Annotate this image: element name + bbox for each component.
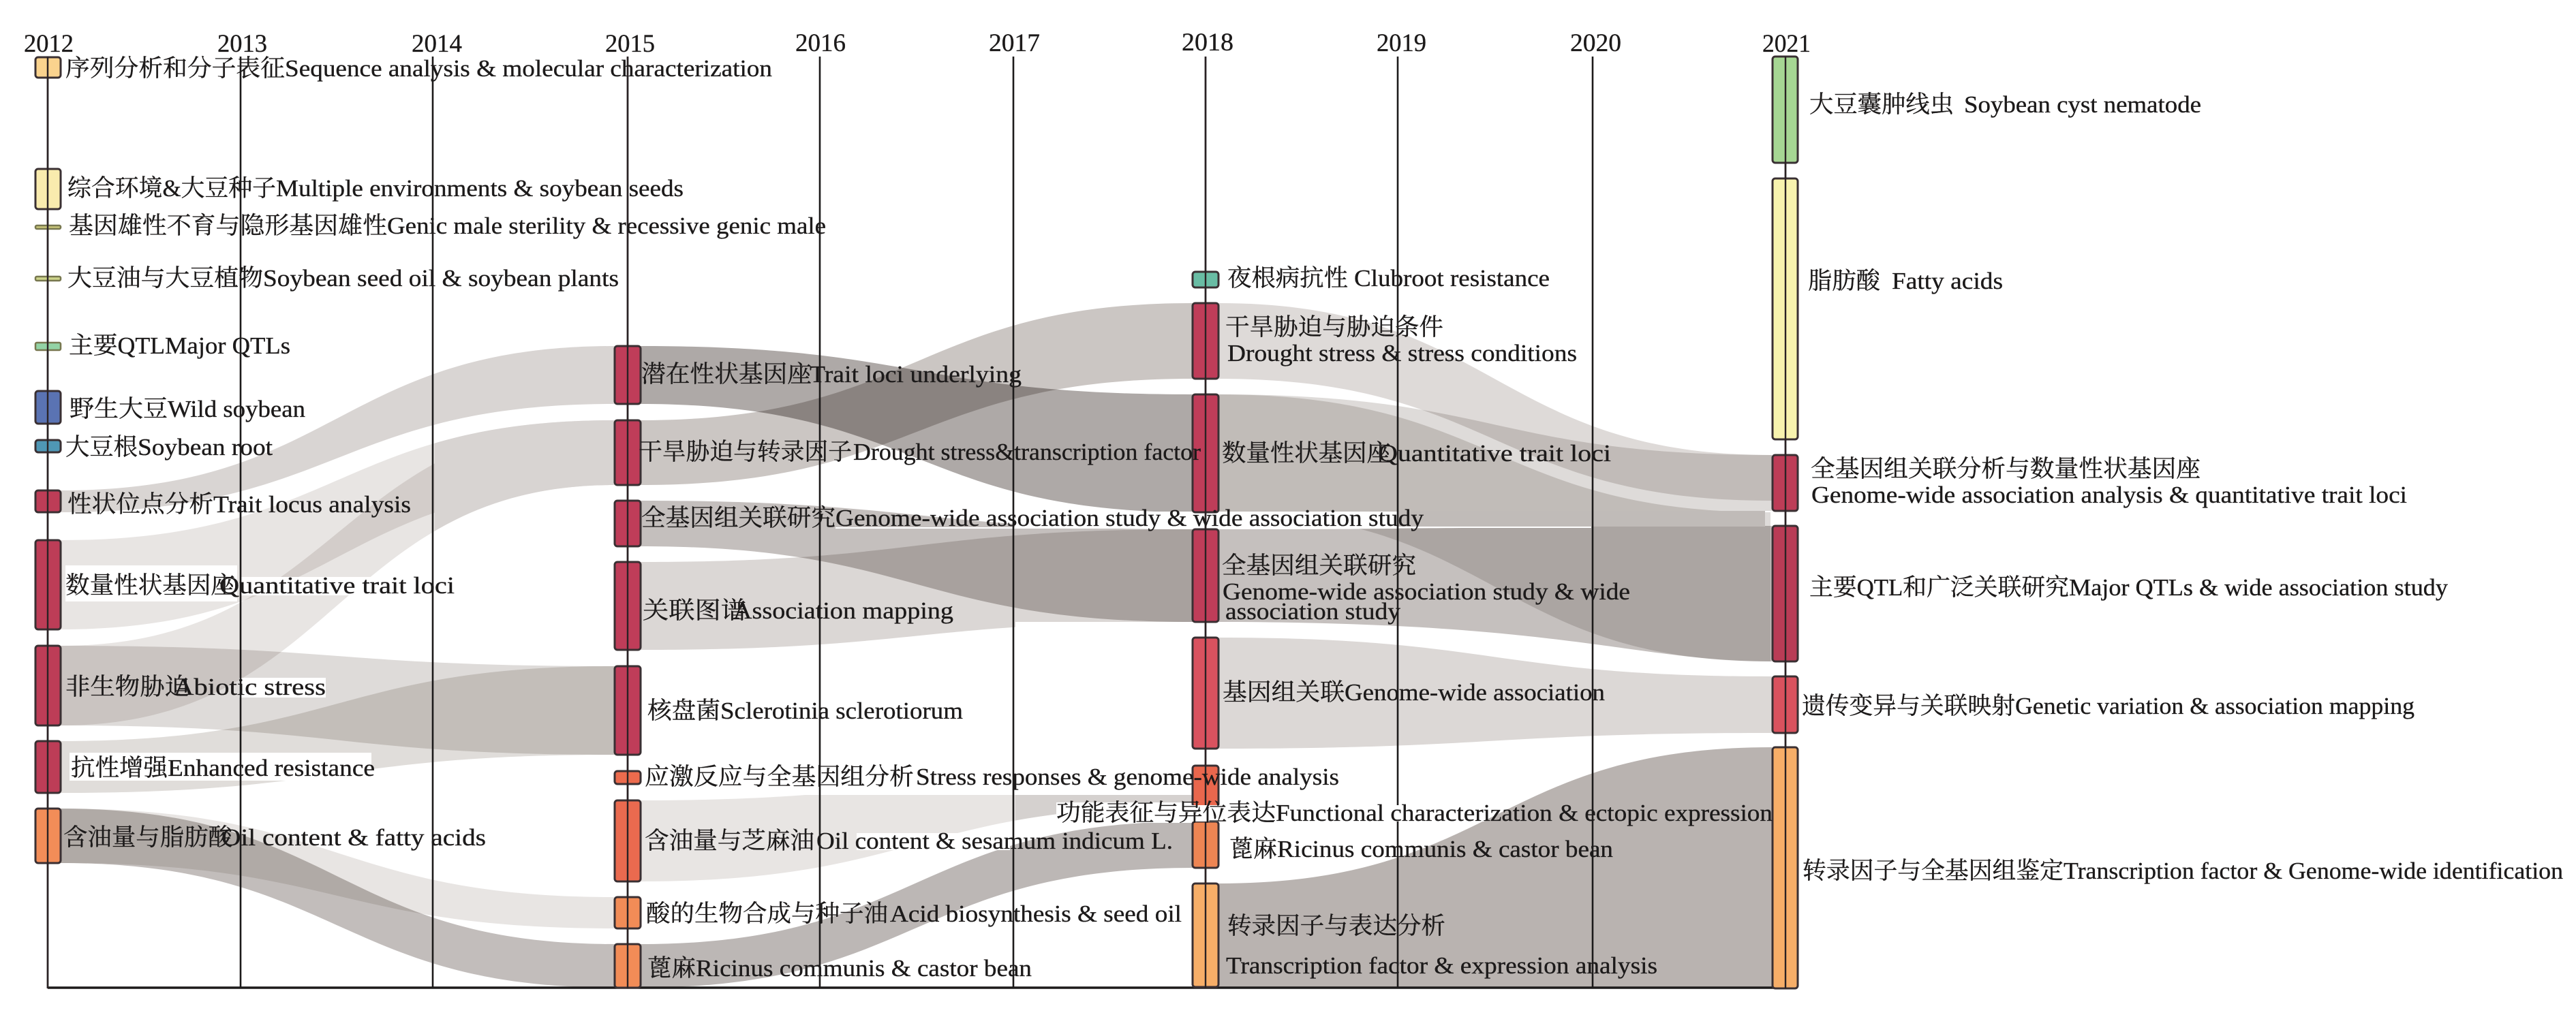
label: ricinus 2015: Ricinus communis & castor bean — [696, 955, 1032, 982]
label: association mapping: Association mapping — [733, 597, 953, 624]
year labels — [24, 29, 1811, 58]
flow: drought stress to drought conditions — [641, 303, 1193, 485]
label: drought stress conditions: 干旱胁迫与胁迫条件 — [1225, 314, 1443, 341]
year labels: 2013 — [217, 30, 267, 58]
label: quantitative trait loci 2018: Quantitative trait loci — [1378, 440, 1611, 467]
label: trait locus analysis — [67, 491, 411, 518]
flow tone change: stress responses inflow right of 2017 — [1015, 795, 1191, 820]
label: trait locus analysis: 性状位点分析 — [67, 491, 213, 518]
label: sequence analysis — [65, 55, 772, 82]
flow: oil content and sesamum to stress responses — [641, 766, 1193, 881]
label: quantitative trait loci 2012: 数量性状基因座 — [65, 572, 235, 599]
label: GWAS 2015: 全基因组关联研究 — [641, 505, 835, 531]
flow: oil content to acid biosynthesis — [61, 809, 615, 928]
label: genome-wide association: Genome-wide association — [1345, 679, 1605, 706]
label: transcription factor and identification: Transcription factor & Genome-wide identification — [2064, 858, 2563, 884]
white background of functional characterization label — [1056, 805, 1484, 822]
nodes: 2015 — [615, 346, 641, 988]
flow: quantitative trait loci to drought stress — [61, 420, 615, 629]
label: functional characterization: 功能表征与异位表达 — [1056, 800, 1276, 826]
year labels: 2021 — [1762, 30, 1811, 58]
label: sequence analysis: 序列分析和分子表征 — [65, 55, 285, 82]
label: multiple environments: 综合环境&大豆种子 — [67, 175, 276, 202]
white label backgrounds — [65, 512, 1591, 850]
label: genetic variation — [1802, 693, 2414, 719]
year labels: 2014 — [412, 30, 462, 58]
label: sclerotinia: 核盘菌 — [647, 698, 720, 724]
label: wild soybean — [70, 396, 305, 422]
label: soybean cyst nematode — [1809, 91, 2201, 118]
flow: transcription factor to transcription factor — [1218, 747, 1772, 988]
label: drought stress and transcription factor: Drought stress&transcription factor — [853, 439, 1201, 465]
label: major QTLs — [69, 332, 290, 359]
label: transcription factor and expression: Transcription factor & expression analysis — [1226, 952, 1657, 979]
label: drought stress conditions: Drought stress & stress conditions — [1227, 340, 1577, 366]
label: oil content and fatty acids — [63, 824, 486, 851]
label: oil content and fatty acids: Oil content & fatty acids — [221, 824, 486, 851]
year axis re-draw over nodes — [48, 57, 1785, 988]
flow: GWAS to GWAS — [641, 501, 1193, 622]
label: soybean seed oil: Soybean seed oil & soybean plants — [263, 265, 619, 292]
nodes: 2012 — [35, 57, 61, 863]
label: soybean cyst nematode: 大豆囊肿线虫 — [1809, 91, 1954, 118]
label: fatty acids: Fatty acids — [1892, 268, 2003, 294]
label: soybean root: 大豆根 — [65, 434, 138, 460]
label: wild soybean: Wild soybean — [168, 396, 305, 422]
label: wild soybean: 野生大豆 — [70, 396, 168, 422]
year labels: 2016 — [795, 29, 846, 57]
flow: trait loci underlying to quantitative trait loci — [641, 346, 1193, 512]
label: association mapping: 关联图谱 — [643, 597, 747, 624]
label: trait locus analysis: Trait locus analysis — [213, 491, 411, 518]
label: major QTLs: 主要QTL — [69, 332, 165, 359]
label: clubroot resistance: 夜根病抗性 — [1227, 265, 1348, 292]
label: acid biosynthesis: Acid biosynthesis & seed oil — [890, 901, 1182, 927]
label: GWAS 2018: 全基因组关联研究 — [1222, 552, 1416, 579]
label: oil content and sesamum — [645, 828, 1173, 854]
label: major QTLs and wide association — [1809, 574, 2449, 601]
flow: association mapping to GWAS — [641, 529, 1193, 650]
label: enhanced resistance: Enhanced resistance — [168, 755, 375, 781]
label: quantitative trait loci 2018: 数量性状基因座 — [1222, 440, 1391, 467]
label: trait loci underlying — [641, 361, 1022, 388]
label: ricinus 2015: 蓖麻 — [647, 955, 696, 982]
label: soybean seed oil — [67, 265, 619, 292]
flow: abiotic stress to drought stress — [61, 420, 615, 725]
label: sequence analysis: Sequence analysis & molecular characterization — [285, 55, 772, 82]
flow: quantitative trait loci to GWAS and QTL — [1218, 394, 1772, 512]
year labels: 2012 — [24, 30, 74, 58]
label: quantitative trait loci 2012: Quantitative trait loci — [219, 572, 455, 599]
label: oil content and sesamum: 含油量与芝麻油 — [645, 828, 814, 854]
label: stress responses: Stress responses & genome-wide analysis — [916, 764, 1339, 790]
label: sclerotinia: Sclerotinia sclerotiorum — [720, 698, 963, 724]
label: ricinus 2018: 蓖麻 — [1229, 836, 1277, 862]
label: abiotic stress: Abiotic stress — [174, 674, 326, 700]
label: drought stress conditions — [1225, 314, 1577, 366]
label: functional characterization — [1056, 800, 1773, 826]
label: clubroot resistance — [1227, 265, 1550, 292]
label: trait loci underlying: 潜在性状基因座 — [641, 361, 812, 388]
label: oil content and sesamum: Oil content & sesamum indicum L. — [816, 828, 1173, 854]
label: abiotic stress — [65, 674, 326, 700]
label: genic male sterility: 基因雄性不育与隐形基因雄性 — [69, 213, 387, 239]
label: trait loci underlying: Trait loci underlying — [810, 361, 1022, 388]
label: ricinus 2018: Ricinus communis & castor bean — [1277, 836, 1613, 862]
label: multiple environments: Multiple environments & soybean seeds — [276, 175, 684, 202]
label: GWAS and QTL 2021: Genome-wide association analysis & quantitative trait loci — [1811, 482, 2407, 508]
label: stress responses — [645, 764, 1339, 790]
flow: abiotic stress to sclerotinia — [61, 646, 615, 755]
label: major QTLs: Major QTLs — [165, 332, 290, 359]
label: drought stress and transcription factor: 干旱胁迫与转录因子 — [639, 439, 852, 465]
flow: quantitative trait loci to major QTLs — [1218, 394, 1770, 661]
label: stress responses: 应激反应与全基因组分析 — [645, 764, 914, 790]
year labels: 2019 — [1377, 29, 1426, 57]
label: acid biosynthesis: 酸的生物合成与种子油 — [646, 901, 888, 927]
label: GWAS 2015: Genome-wide association study & wide association study — [835, 505, 1424, 531]
flow: enhanced resistance to sclerotinia — [61, 666, 615, 793]
grey band between GWAS and major QTL targets — [1397, 511, 1765, 527]
year labels: 2017 — [989, 29, 1040, 57]
label: enhanced resistance: 抗性增强 — [71, 755, 168, 781]
label: fatty acids — [1808, 268, 2003, 294]
flow: oil content to ricinus — [61, 809, 615, 988]
label: major QTLs and wide association: 主要QTL和广泛关联研究 — [1809, 574, 2069, 601]
label: oil content and fatty acids: 含油量与脂肪酸 — [63, 824, 233, 851]
label: functional characterization: Functional characterization & ectopic expression — [1276, 800, 1773, 826]
label: major QTLs and wide association: Major QTLs & wide association study — [2069, 574, 2449, 601]
year labels: 2015 — [605, 30, 655, 58]
label: genome-wide association: 基因组关联 — [1223, 679, 1345, 706]
label: enhanced resistance — [71, 755, 375, 781]
label: transcription factor and expression — [1226, 913, 1657, 979]
label: soybean root: Soybean root — [138, 434, 273, 460]
label: multiple environments — [67, 175, 684, 202]
label: genetic variation: 遗传变异与关联映射 — [1802, 693, 2015, 719]
label: GWAS and QTL 2021: 全基因组关联分析与数量性状基因座 — [1811, 456, 2201, 482]
nodes: 2018 — [1193, 272, 1218, 987]
label: transcription factor and identification — [1803, 858, 2563, 884]
flow tone change: drought stress inflow right of 2014 — [435, 420, 608, 531]
axis frame: year lines and baseline — [48, 57, 1785, 988]
label: acid biosynthesis — [646, 901, 1182, 927]
label: soybean cyst nematode: Soybean cyst nematode — [1964, 91, 2201, 118]
label: GWAS and QTL 2021 — [1811, 456, 2407, 508]
flow: drought conditions to GWAS and QTL — [1218, 303, 1772, 501]
label: soybean root — [65, 434, 273, 460]
flows between topic nodes — [61, 303, 1772, 988]
year labels: 2018 — [1182, 29, 1233, 57]
label: quantitative trait loci 2012 — [65, 572, 455, 599]
flow: trait locus to trait loci underlying — [61, 346, 615, 512]
label: GWAS 2018 — [1222, 552, 1630, 625]
label: GWAS 2018: Genome-wide association study & wide — [1223, 578, 1630, 605]
label: quantitative trait loci 2018 — [1222, 440, 1611, 467]
label: abiotic stress: 非生物胁迫 — [65, 674, 189, 700]
label: fatty acids: 脂肪酸 — [1808, 268, 1881, 294]
label: genetic variation: Genetic variation & association mapping — [2015, 693, 2414, 719]
label: transcription factor and expression: 转录因子与表达分析 — [1227, 913, 1445, 939]
year labels: 2020 — [1570, 29, 1621, 57]
label: GWAS 2018: association study — [1225, 598, 1401, 625]
flow: ricinus to ricinus — [641, 822, 1193, 988]
label: drought stress and transcription factor — [639, 439, 1201, 465]
flow: genome-wide association to genetic variation — [1218, 638, 1772, 749]
nodes: 2021 — [1773, 57, 1798, 988]
label: genic male sterility: Genic male sterility & recessive genic male — [387, 213, 826, 239]
label: soybean seed oil: 大豆油与大豆植物 — [67, 265, 263, 292]
label: association mapping — [643, 597, 953, 624]
label: genome-wide association — [1223, 679, 1605, 706]
label: genic male sterility — [69, 213, 826, 239]
label: clubroot resistance: Clubroot resistance — [1354, 265, 1550, 292]
label: transcription factor and identification: 转录因子与全基因组鉴定 — [1803, 858, 2064, 884]
flow: GWAS to major QTLs — [1218, 526, 1772, 661]
